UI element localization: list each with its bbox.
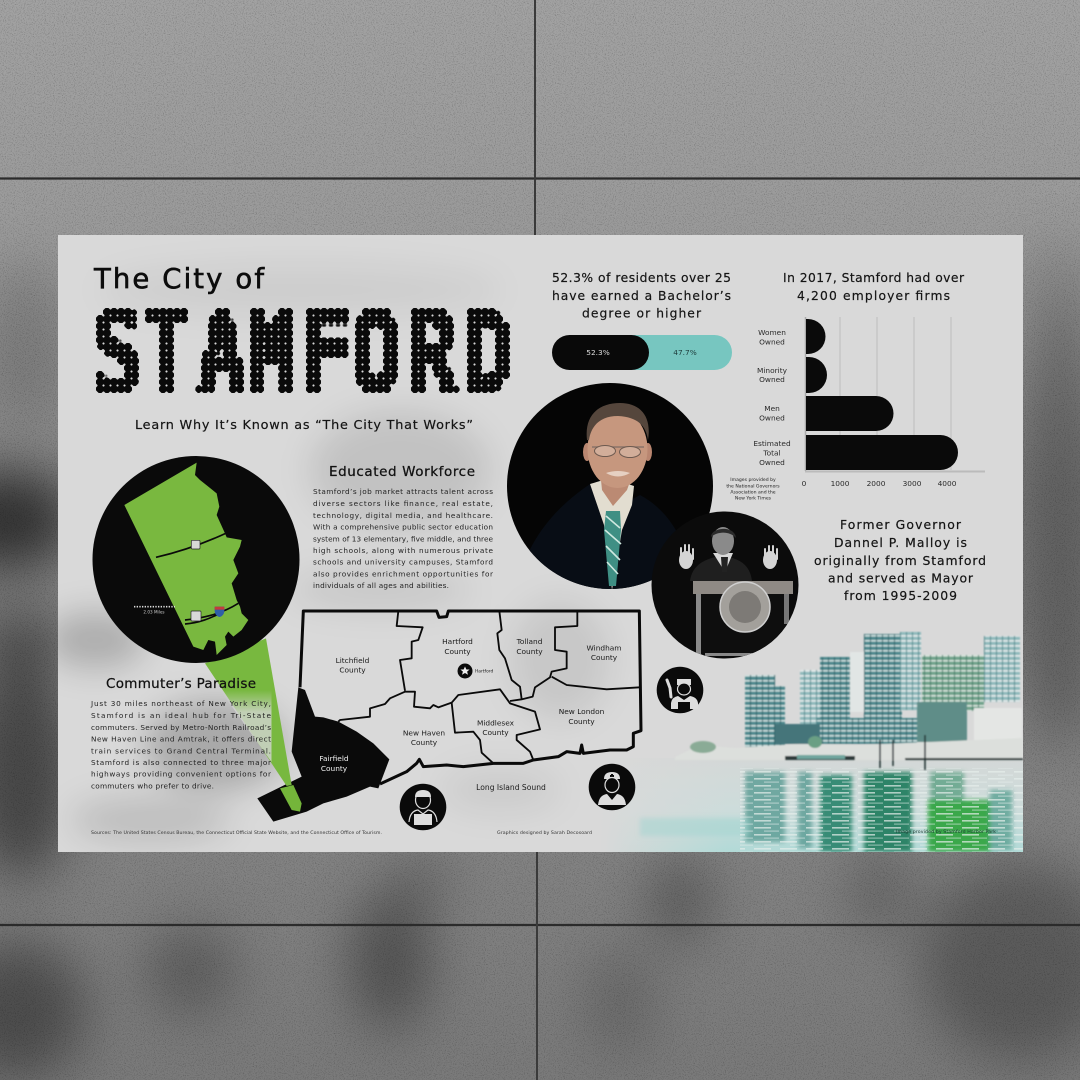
heading: bachelor's degree statistic: have earned a Bachelor’s xyxy=(552,289,731,303)
panel: harbor skyline photo xyxy=(600,632,1023,852)
marker: Hartford capital star: Hartford xyxy=(475,668,493,674)
category labels: Owned xyxy=(759,375,785,384)
text block: commuter's paradise: Stamford is also connected to three major xyxy=(91,758,271,767)
heading: employer firms: In 2017, Stamford had over xyxy=(783,271,965,285)
icon: office worker xyxy=(400,784,446,830)
text block: educated workforce: diverse sectors like finance, real estate, xyxy=(313,499,493,508)
scale bar xyxy=(134,604,175,609)
label: Fairfield County xyxy=(319,754,349,773)
axis labels: 1000 xyxy=(831,479,850,488)
highway lines xyxy=(156,533,238,624)
map labels: County xyxy=(568,717,595,726)
bar: women owned xyxy=(806,319,826,354)
category labels: Owned xyxy=(759,414,785,422)
footer: sources: Sources: The United States Census Bureau, the Connecticut Official State Website, and the Connecticut Office of Tourism. xyxy=(91,830,382,836)
label: Fairfield County: Fairfield xyxy=(319,754,349,763)
category labels: Owned xyxy=(759,338,785,346)
map labels: Hartford xyxy=(442,637,473,646)
photo credit xyxy=(726,477,780,502)
photo: Malloy at podium xyxy=(652,512,798,658)
shirt xyxy=(590,478,634,590)
state outline xyxy=(300,611,641,784)
category labels xyxy=(753,328,791,467)
footer: photo credit: Image provided by Stamford Harbor Park xyxy=(896,829,996,835)
title: dotted STAMFORD wordmark: STAMFORD xyxy=(93,289,513,420)
icon: mechanic xyxy=(657,667,703,713)
map labels: County xyxy=(591,653,618,662)
title: The City of xyxy=(93,263,265,295)
text block: educated workforce: individuals of all ages and abilities. xyxy=(313,581,449,590)
text block: former governor xyxy=(814,517,986,603)
map labels: Middlesex xyxy=(477,718,515,728)
map labels: County xyxy=(411,738,438,747)
tile joints xyxy=(0,178,1080,925)
text block: educated workforce: With a comprehensive public sector education xyxy=(313,522,493,532)
text block: commuter's paradise: commuters who prefer to drive. xyxy=(91,782,214,790)
map labels: Windham xyxy=(586,644,622,652)
text block: commuter's paradise: New Haven Line and Amtrak, it offers direct xyxy=(91,734,271,744)
glasses xyxy=(592,446,644,448)
photo credit: the National Governors xyxy=(726,484,780,490)
heading: Educated Workforce: Educated Workforce xyxy=(329,464,475,480)
heading: bachelor's degree statistic: 52.3% of residents over 25 xyxy=(552,271,731,285)
neck xyxy=(601,482,629,506)
axis labels: 3000 xyxy=(903,479,922,488)
axis labels: 0 xyxy=(802,479,807,488)
map labels: County xyxy=(482,728,509,737)
photo credit: Association and the xyxy=(730,490,776,496)
axis labels: 2000 xyxy=(867,479,886,488)
text block: educated workforce: also provides enrichment opportunities for xyxy=(313,570,493,578)
photo: Malloy portrait xyxy=(507,383,713,600)
marker: Hartford capital star xyxy=(458,664,493,678)
inset map of Stamford xyxy=(92,456,300,663)
text block: former governor: Dannel P. Malloy is xyxy=(834,535,967,550)
Stamford land shape xyxy=(124,463,248,655)
buildings xyxy=(675,632,1023,770)
map labels: Long Island Sound xyxy=(476,783,546,792)
label: Fairfield County: County xyxy=(321,764,348,773)
face xyxy=(588,410,648,488)
progress bar: degree share xyxy=(552,335,732,370)
text block: commuter's paradise xyxy=(90,699,272,790)
smile xyxy=(606,471,630,476)
text block: former governor: and served as Mayor xyxy=(828,570,974,586)
map labels: Tolland xyxy=(516,637,543,646)
text block: educated workforce xyxy=(313,487,494,590)
Stamford patch xyxy=(280,785,302,812)
inset map of Stamford: 2.03 Miles xyxy=(143,610,165,615)
photo credit: New York Times xyxy=(735,496,772,502)
text block: educated workforce: technology, digital media, and healthcare. xyxy=(313,511,493,520)
zoom beam from county to inset xyxy=(205,638,302,812)
bar: estimated total xyxy=(806,435,958,470)
ears xyxy=(583,443,589,461)
text block: commuter's paradise: Stamford is an ideal hub for Tri-State xyxy=(91,711,272,720)
map labels: Litchfield xyxy=(336,656,370,665)
text block: commuter's paradise: train services to Grand Central Terminal. xyxy=(91,746,271,756)
text block: educated workforce: high schools, along with numerous private xyxy=(313,546,494,555)
category labels: Total xyxy=(762,448,781,458)
footer: designer credit: Graphics designed by Sarah Decosoard xyxy=(497,830,592,836)
bar: men owned xyxy=(806,396,894,431)
hair xyxy=(587,403,649,440)
text block: former governor: originally from Stamford xyxy=(814,553,986,568)
map labels: County xyxy=(339,666,366,674)
heading: Commuter's Paradise: Commuter’s Paradise xyxy=(106,676,256,692)
county: Fairfield xyxy=(257,687,389,822)
map labels: County xyxy=(516,647,543,656)
poster sheet xyxy=(45,235,1023,852)
heading: employer firms: 4,200 employer firms xyxy=(797,289,950,303)
progress bar: degree share: 47.7% xyxy=(673,348,697,357)
icon: nurse xyxy=(589,764,635,810)
subtitle: Learn Why It’s Known as “The City That Works” xyxy=(135,418,473,433)
suit xyxy=(530,484,676,589)
text block: commuter's paradise: highways providing convenient options for xyxy=(91,770,271,778)
map labels xyxy=(336,637,622,792)
axis labels: 4000 xyxy=(938,479,957,488)
photo credit: Images provided by xyxy=(730,477,776,483)
highway shields xyxy=(191,540,200,549)
bar chart: employer firms by ownership xyxy=(753,317,985,488)
bar: minority owned xyxy=(806,357,827,393)
heading: bachelor's degree statistic xyxy=(552,271,731,320)
category labels: Estimated xyxy=(753,439,791,448)
text block: former governor: Former Governor xyxy=(840,517,962,532)
text block: educated workforce: system of 13 elementary, five middle, and three xyxy=(313,534,494,544)
heading: employer firms xyxy=(783,271,965,303)
map labels: County xyxy=(444,647,471,656)
map labels: New London xyxy=(559,707,605,716)
tie xyxy=(604,511,621,586)
county map of Connecticut xyxy=(257,611,641,822)
progress bar: degree share: 52.3% xyxy=(586,348,610,357)
shore xyxy=(675,738,1023,760)
axis labels xyxy=(802,479,957,488)
category labels: Minority xyxy=(757,366,788,375)
water xyxy=(624,780,1023,852)
heading: bachelor's degree statistic: degree or higher xyxy=(582,306,702,320)
text block: commuter's paradise: commuters. Served by Metro-North Railroad’s xyxy=(91,723,271,732)
category labels: Men xyxy=(764,404,780,413)
text block: educated workforce: schools and university campuses, Stamford xyxy=(313,558,493,566)
category labels: Owned xyxy=(759,458,785,467)
map labels: New Haven xyxy=(403,728,445,738)
category labels: Women xyxy=(758,328,786,337)
text block: educated workforce: Stamford’s job market attracts talent across xyxy=(313,487,493,496)
text block: former governor: from 1995-2009 xyxy=(844,588,957,603)
text block: commuter's paradise: Just 30 miles northeast of New York City, xyxy=(90,699,271,708)
county borders xyxy=(338,611,640,763)
